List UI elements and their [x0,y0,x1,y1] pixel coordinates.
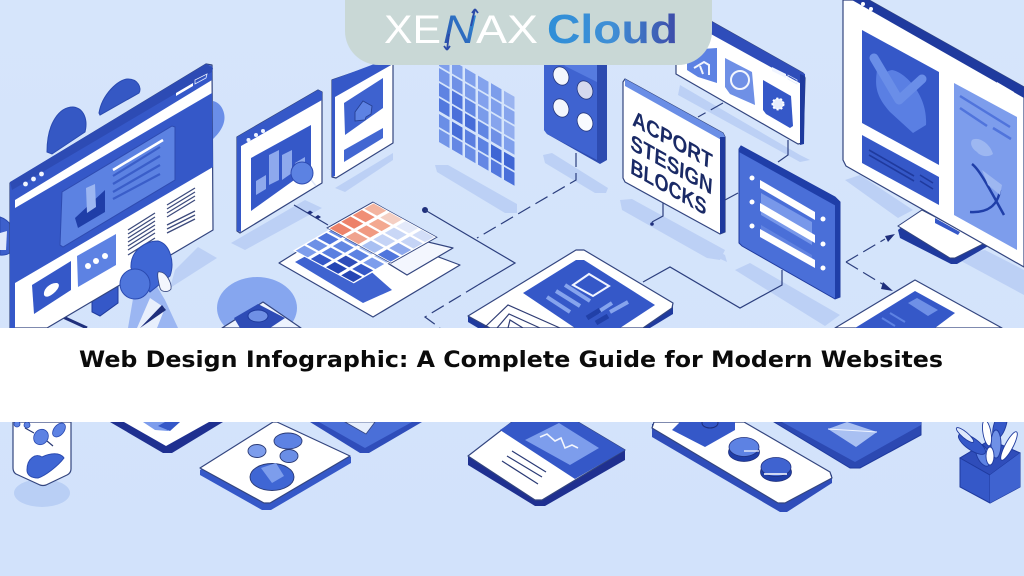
panel: lower card 3 [310,422,422,453]
window dots [23,172,44,186]
hero panel [60,126,175,247]
panel: upload window [332,58,393,178]
panel: signage card [623,79,725,234]
icon: magnifier [291,162,316,186]
panel: chart window [237,90,322,233]
side panel [954,83,1017,250]
table: orange cells [327,202,437,263]
logo wordmark: XENAX: XE [384,8,441,52]
panel: right monitor [843,0,1024,267]
check panel [862,30,939,165]
monitor stand [898,210,990,264]
bar chart [256,150,305,195]
panel: layered tables [279,202,460,317]
panel: layout blocks card [739,146,840,299]
panel: central layout card [468,250,673,328]
panel: left monitor [10,64,213,328]
logo wordmark: Cloud: Cloud [547,6,678,52]
connector: chart to table [294,205,328,225]
card heading: BLOCKS [630,154,707,221]
icon: pointing hand and base [120,241,178,328]
logo badge [345,0,712,65]
panel: icon strip card [676,15,805,145]
panel: lower card 6 envelope [774,422,921,468]
panel: lower card 1 [110,422,223,453]
card heading: ACPORT [632,106,714,176]
logo wordmark: XENAX: N [443,8,476,52]
floor shadows [170,85,1024,326]
table: blue cells [293,225,398,283]
logo wordmark: XENAX: AX [476,8,538,52]
title band [0,328,1024,422]
panel: lower-right mini card [835,280,1002,328]
title: Web Design Infographic: A Complete Guide for Modern Websites [79,348,943,373]
panel: colour grid [439,53,514,186]
text lines [128,188,195,255]
card heading: STESIGN [630,130,713,200]
card heading [630,106,714,221]
panel: lower-left phone [13,421,71,507]
icon: spotlight and cube device [217,277,301,339]
caption panel [862,135,939,205]
panel: lower card 2 circles [200,422,351,510]
icon: blobs behind left monitor [0,79,225,255]
address bar [176,83,193,96]
panel: lower card 5 donuts [652,418,832,512]
tile: dots [77,234,116,287]
tile: fruit [32,261,71,314]
connectors: dashed links [422,103,895,328]
icon: plant pot [955,409,1020,503]
icon: logo arrows [444,9,478,50]
logo wordmark: XENAX [384,8,538,52]
monitor stand [92,275,118,316]
panel: button tile [544,40,607,164]
panel: lower card 4 sparkline [468,422,625,506]
